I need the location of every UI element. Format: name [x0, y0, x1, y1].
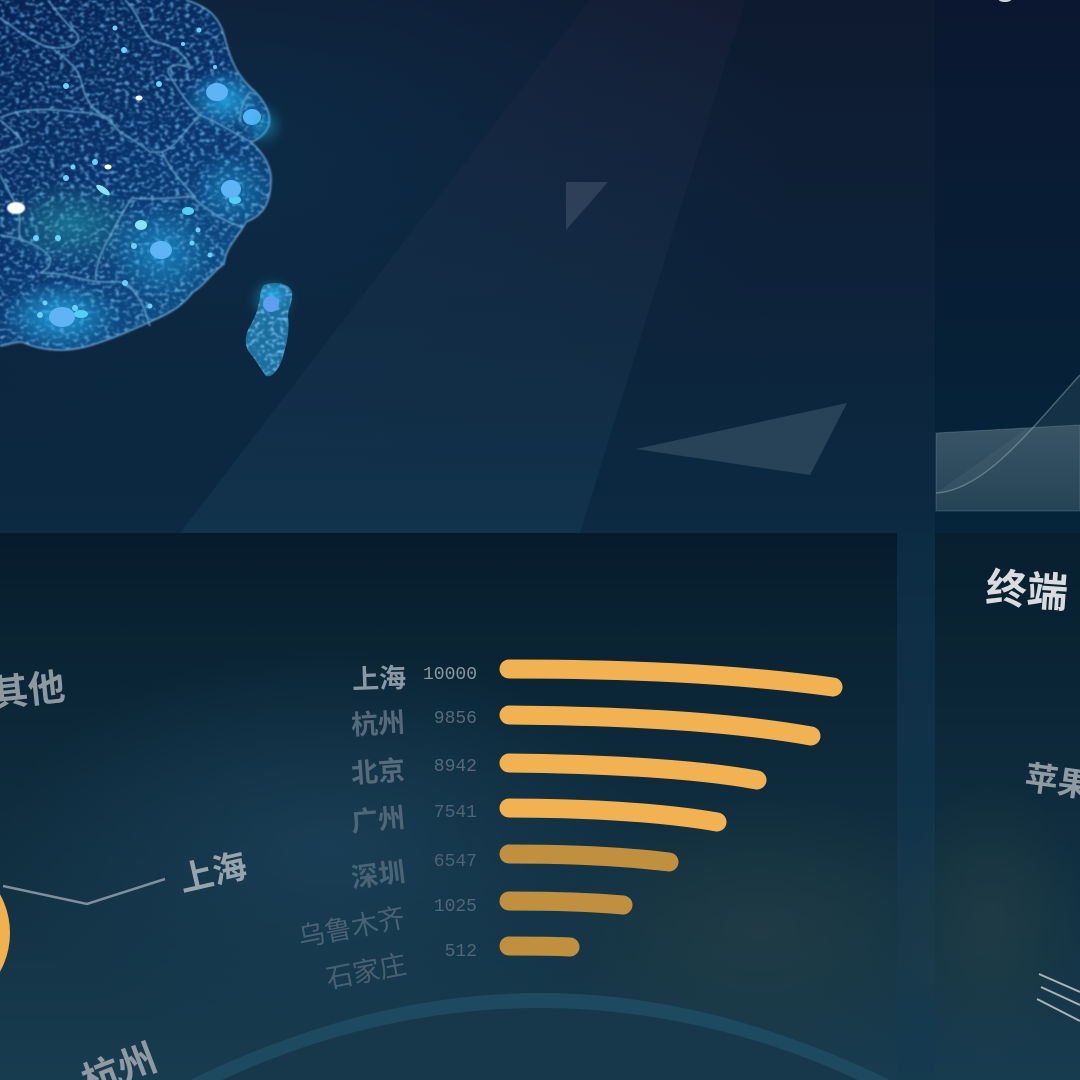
gauge arc [190, 993, 890, 1080]
chart fragment top right [936, 375, 1080, 511]
city values: 8942 [434, 757, 477, 777]
city labels: 深圳 [350, 857, 407, 893]
speck at top right [999, 0, 1011, 2]
bottom column separator [897, 533, 935, 1080]
bar chart [509, 669, 833, 947]
city labels: 广州 [350, 803, 406, 837]
city values: 10000 [423, 665, 477, 685]
decorative triangle large [636, 403, 847, 475]
city labels: 杭州 [350, 708, 406, 740]
leader line [3, 879, 165, 904]
city values: 7541 [434, 803, 477, 823]
city labels: 乌鲁木齐 [296, 903, 407, 953]
terminal title: 终端 [984, 565, 1069, 617]
island [246, 278, 294, 376]
city values: 512 [445, 942, 477, 962]
city lights [7, 26, 261, 327]
city values: 9856 [434, 709, 477, 729]
city labels [296, 663, 409, 994]
top right panel [935, 0, 1080, 533]
city labels: 上海 [352, 663, 407, 695]
leader lines [1037, 974, 1080, 1021]
city values [423, 665, 477, 962]
light beam [180, 0, 745, 533]
donut orange segment [0, 853, 10, 1013]
panel: ranking [0, 533, 970, 1080]
glow at east coast [248, 111, 276, 139]
city values: 6547 [434, 852, 477, 872]
map of China fragment [0, 0, 280, 355]
city labels: 石家庄 [324, 949, 409, 994]
panel: terminal [895, 533, 1080, 1080]
decorative triangle small [566, 182, 608, 230]
city labels: 北京 [350, 755, 406, 789]
city values: 1025 [434, 897, 477, 917]
province borders [0, 0, 271, 350]
donut label: Shanghai: 上海 [176, 847, 251, 899]
